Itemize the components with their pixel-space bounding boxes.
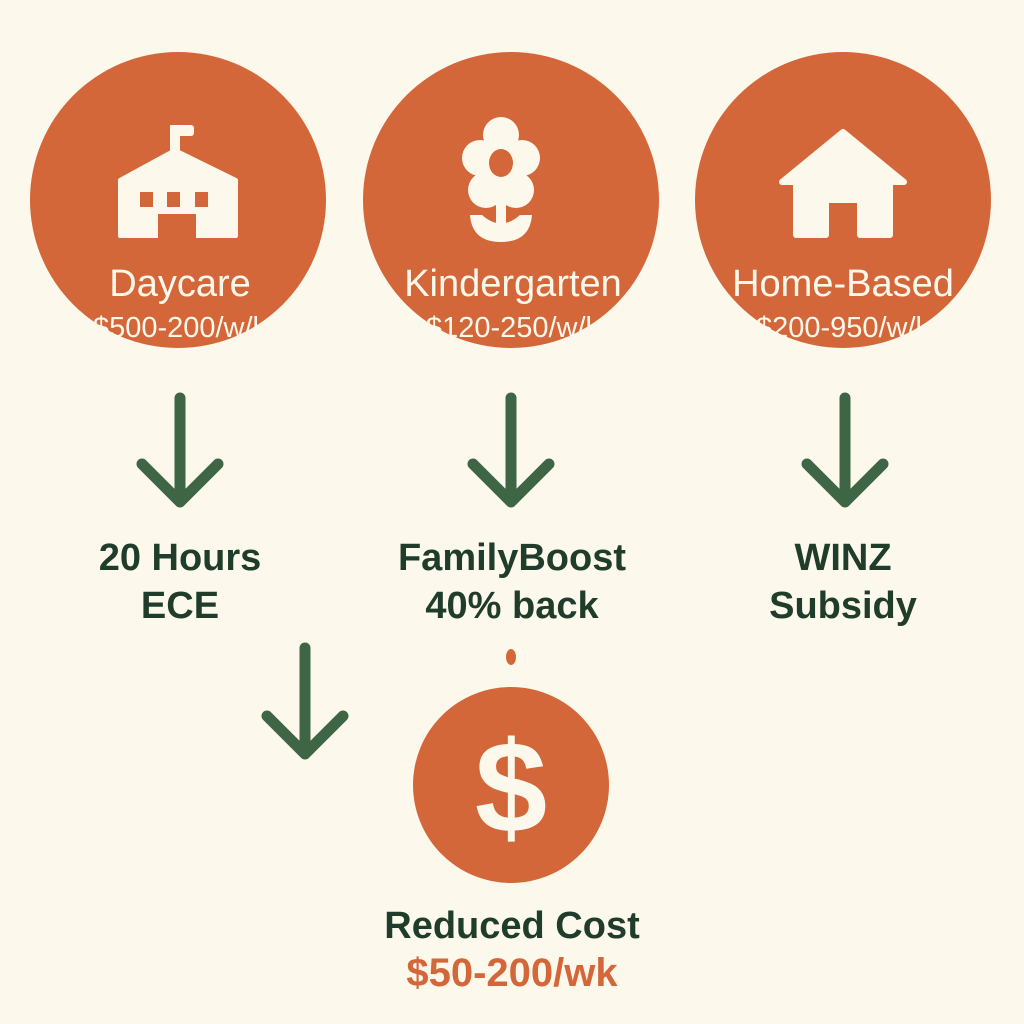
text: 20 hours ECE: 20 Hours [99,537,261,579]
panel: kindergarten [363,52,659,348]
heading: home-based: Home-Based [732,263,954,305]
arrow: daycare down [142,398,218,502]
icon: dollar circle [413,687,609,883]
arrow: home-based down [807,398,883,502]
heading: daycare: Daycare [109,263,251,305]
text: kindergarten price: $120-250/w/k [426,312,601,344]
arrow: to reduced cost [267,648,343,754]
arrow: kindergarten down [473,398,549,502]
text: winz subsidy: WINZ [794,537,892,579]
text: daycare price: $500-200/w/k [93,312,268,344]
panel: daycare [30,52,326,348]
text: 20 hours ECE: ECE [141,585,219,627]
text: familyboost: 40% back [425,585,599,627]
heading: kindergarten: Kindergarten [404,263,622,305]
text: reduced price: $50-200/wk [406,951,618,995]
text: familyboost: FamilyBoost [398,537,626,579]
panel: home-based [695,52,991,348]
icon: house [782,132,904,235]
icon: dollar circle: $ [475,714,547,860]
icon: flower [462,117,540,242]
text: winz subsidy: Subsidy [769,585,917,627]
text: home-based price: $200-950/w/k [756,312,931,344]
dot [506,649,516,665]
heading: reduced cost: Reduced Cost [384,905,640,947]
icon: schoolhouse [120,125,236,236]
